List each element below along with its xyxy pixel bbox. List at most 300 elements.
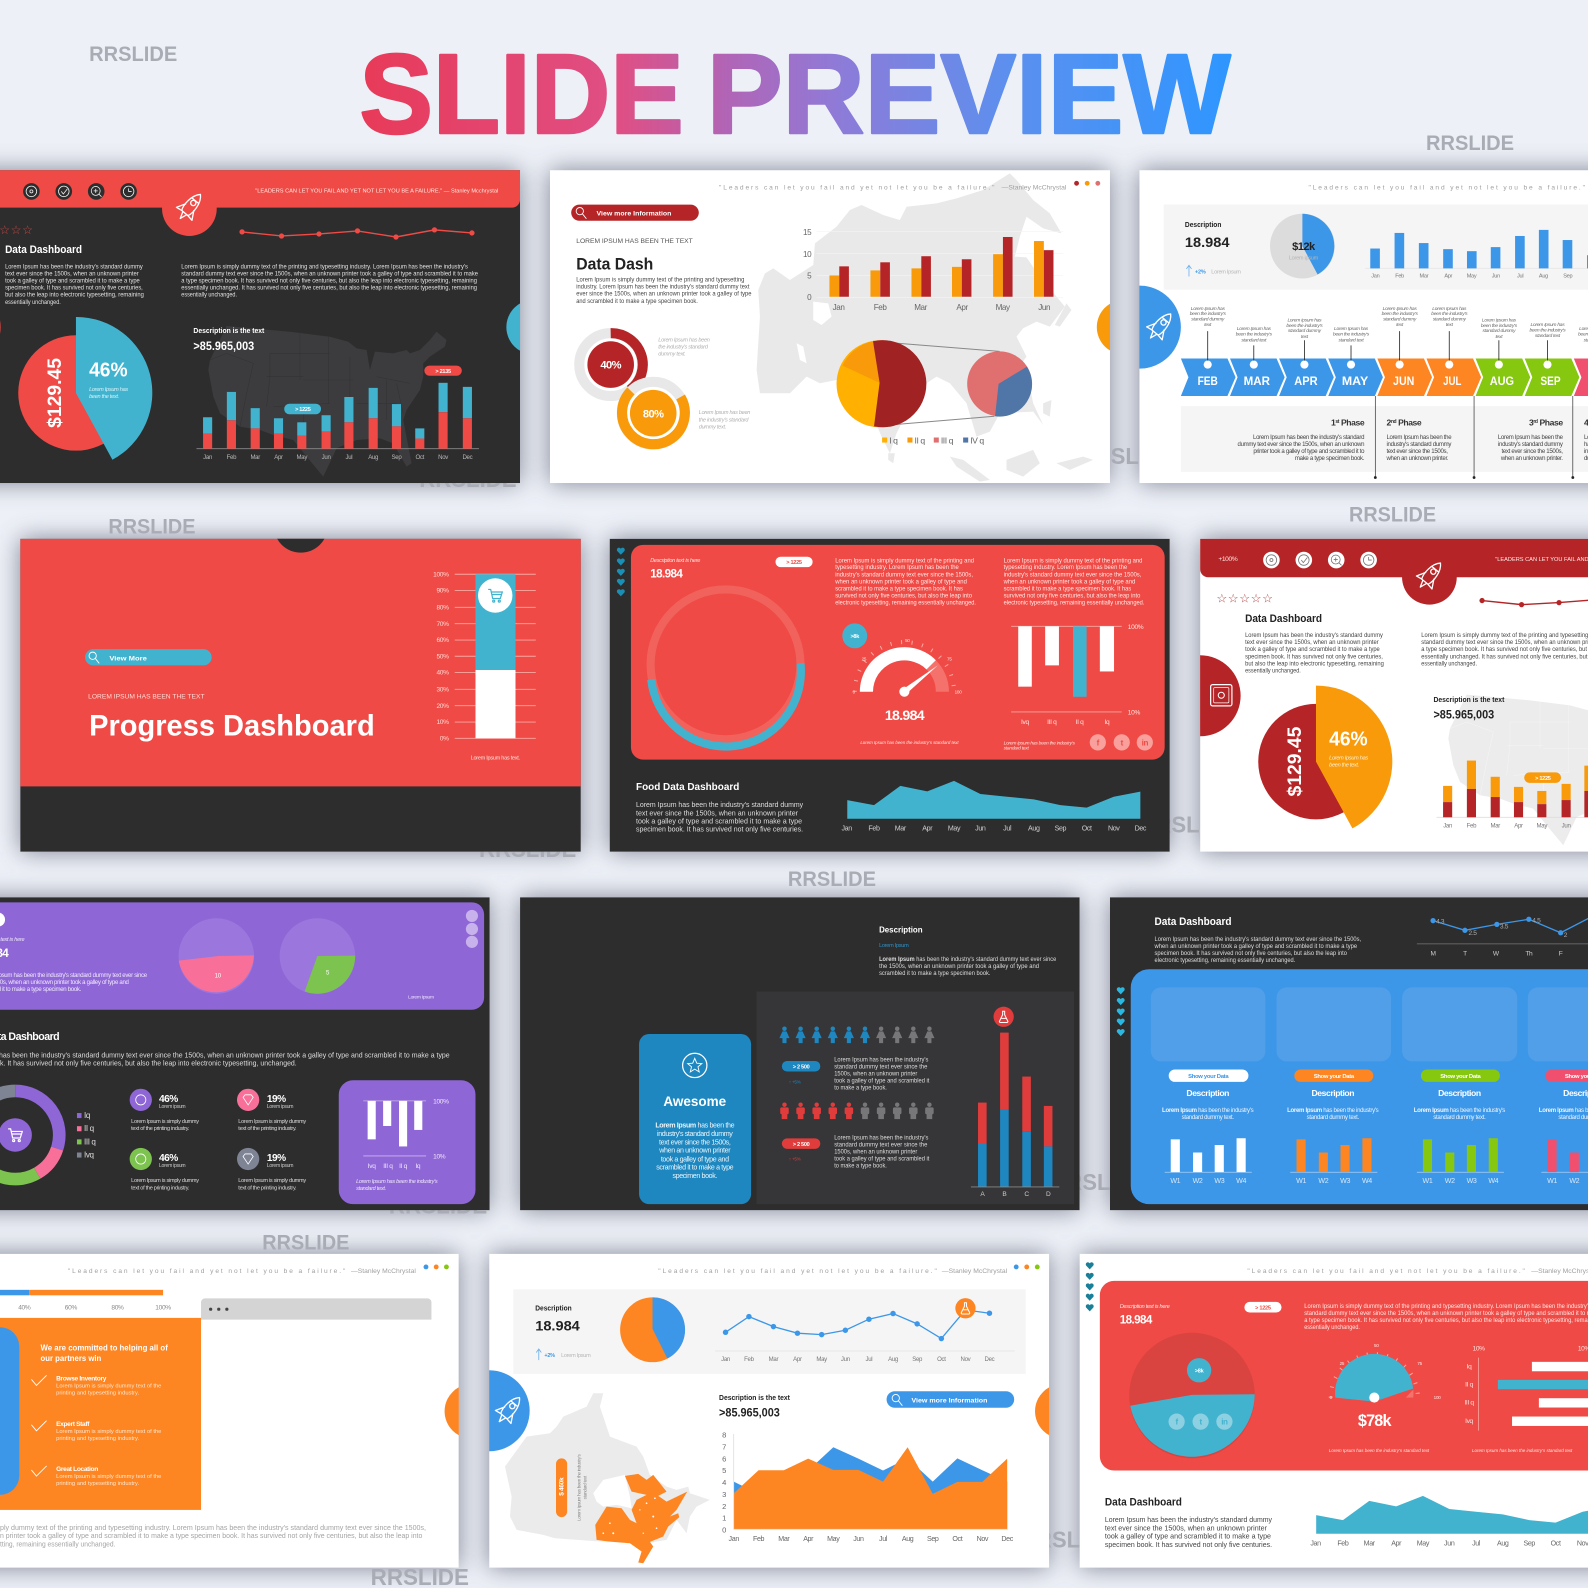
social icons	[466, 910, 478, 948]
text block	[1154, 937, 1361, 964]
stacked bar chart: Mar	[1490, 823, 1500, 829]
edge circle	[445, 1384, 499, 1439]
text block: industry. Lorem Ipsum has been the industry's standard dummy text	[576, 285, 750, 291]
column three: Lorem Ipsum has been the industry's	[1414, 1108, 1505, 1114]
pie chart: $129.45	[1285, 726, 1306, 797]
text block two: electronic typesetting, remaining essentially unchanged.	[1004, 600, 1145, 606]
people row two	[780, 1102, 934, 1119]
column one: W3	[1214, 1177, 1225, 1185]
column three: Show your Data	[1440, 1074, 1482, 1080]
text row two: Lorem Ipsum has been the industry's	[834, 1136, 928, 1142]
area chart: May	[948, 824, 961, 832]
stacked bar chart	[1436, 761, 1588, 829]
column three: Description	[1438, 1088, 1481, 1098]
text block two: survived not only five centuries, but also the leap into	[1004, 594, 1141, 600]
timeline captions: been the industry's	[1382, 311, 1418, 317]
flask badge	[955, 1298, 976, 1318]
pill row one	[782, 1061, 820, 1085]
text block: Lorem Ipsum is simply dummy text of the printing and typesetting	[576, 278, 744, 284]
line chart: Feb	[744, 1357, 755, 1363]
blue card: took a galley of type and	[661, 1155, 729, 1163]
column one: Description	[1186, 1088, 1229, 1098]
gauge: 25	[862, 656, 867, 661]
watermarks: RRSLIDE	[1079, 443, 1176, 469]
quote: "LEADERS CAN LET YOU FAIL AND YET NOT LET YOU BE A FAILURE." — Stanley Mcchrystal	[255, 188, 498, 194]
pie chart: been the text.	[89, 394, 119, 400]
line chart: Nov	[961, 1357, 972, 1363]
flask badge	[994, 1007, 1014, 1027]
description: Description	[879, 926, 923, 935]
legend: III q	[84, 1137, 96, 1146]
text block two: typesetting industry. Lorem Ipsum has been the	[1004, 565, 1128, 571]
stat 46% purple: Lorem Ipsum is simply dummy	[131, 1119, 199, 1125]
quote: —Stanley McChrystal	[1002, 184, 1067, 191]
thermometer chart: 30%	[436, 687, 449, 694]
social icons: f	[1175, 1418, 1178, 1427]
description stat: Description	[1185, 220, 1222, 229]
text block one: scrambled it to make a type specimen book. It has	[835, 586, 963, 592]
pie chart: 46%	[1329, 728, 1368, 750]
area chart: Dec	[1001, 1535, 1014, 1543]
description: scrambled it to make a type specimen book.	[879, 971, 991, 977]
header bar	[0, 170, 520, 208]
item browse inventory: Lorem Ipsum is simply dummy text of the	[56, 1383, 161, 1389]
text block: n printer took a galley of type and scrambled it to make a type specimen book. It has survived not only five centuries, but also the leap into	[0, 1532, 422, 1540]
donut captions: dummy text.	[658, 351, 686, 357]
text block one	[834, 558, 976, 606]
timeline chevrons: AUG	[1490, 374, 1514, 388]
text block: when an unknown printer took a galley of type and scrambled it to make a type	[1154, 944, 1358, 950]
line chart: Oct	[937, 1357, 946, 1363]
quote: —Stanley McChrystal	[942, 1268, 1008, 1275]
horizontal bar chart: Iq	[1467, 1364, 1472, 1371]
edge circle	[1096, 304, 1110, 350]
text block	[0, 973, 148, 993]
stat 19% pink: Lorem ipsum	[267, 1104, 293, 1110]
stat: Description text is here	[650, 558, 700, 564]
small purple chart card: 100%	[433, 1098, 449, 1105]
text row two: took a galley of type and scrambled it	[834, 1157, 930, 1163]
text block right	[1421, 633, 1588, 667]
item expert staff: printing and typesetting industry.	[56, 1436, 140, 1442]
text block: Lorem Ipsum has been the industry's standard dummy text ever since the 1500s,	[1155, 937, 1361, 943]
text block one: typesetting industry. Lorem Ipsum has been the	[835, 565, 959, 571]
callout pills: > 1225	[295, 407, 311, 413]
sparkline	[1479, 598, 1588, 607]
bar chart	[803, 228, 1053, 312]
column four	[1539, 1069, 1588, 1185]
callout pills: > 2135	[435, 369, 451, 375]
bar chart: Feb	[1395, 273, 1404, 279]
item browse inventory: printing and typesetting industry.	[56, 1391, 140, 1397]
panel: slide 10 orange commitments	[0, 1254, 499, 1568]
area chart: Oct	[952, 1535, 963, 1543]
timeline chevrons: JUN	[1393, 374, 1414, 388]
pie chart: $129.45	[45, 358, 66, 428]
stacked bar chart: Jun	[322, 455, 331, 461]
area chart: Mar	[778, 1535, 790, 1543]
stacked bars: C	[1024, 1191, 1029, 1198]
callout pill: > 1225	[1535, 776, 1551, 782]
timeline captions: text	[1396, 322, 1404, 328]
description stat: 18.984	[535, 1319, 580, 1335]
stacked bar chart: Nov	[438, 455, 449, 461]
vertical caption: Lorem Ipsum has been the industry's	[576, 1454, 581, 1521]
bar chart: Apr	[956, 303, 969, 312]
social icons: in	[1142, 738, 1148, 747]
social icons: t	[1121, 738, 1124, 747]
area chart: Dec	[1135, 824, 1147, 832]
gauge	[853, 638, 962, 746]
gauge: 18.984	[885, 708, 925, 724]
text block: tting, remaining essentially unchanged.	[0, 1540, 115, 1548]
line chart: 2.5	[1468, 930, 1477, 937]
card caption: Lorem Ipsum	[408, 995, 434, 1001]
line chart	[715, 1310, 1015, 1363]
pie chart	[620, 1297, 685, 1362]
text row one: took a galley of type and scrambled it	[834, 1079, 930, 1085]
pie chart green	[280, 918, 355, 994]
horizontal bar chart: Ivq	[1465, 1418, 1474, 1425]
gauge: 100	[955, 690, 962, 695]
stat 19% pink: 19%	[267, 1094, 286, 1105]
callout pills	[284, 366, 462, 414]
gauge: 0	[853, 690, 856, 695]
text block: Lorem Ipsum has been the industry's standard dummy	[636, 801, 804, 809]
rocket badge	[162, 194, 217, 236]
column two: W1	[1296, 1177, 1306, 1185]
timeline captions: Lorem Ipsum has	[1531, 322, 1565, 328]
panel: slide 4 progress dashboard	[20, 499, 581, 852]
commitment heading: our partners win	[41, 1353, 101, 1363]
hearts	[1086, 1262, 1094, 1311]
phase text: text ever since the 1500s,	[1501, 449, 1563, 455]
description stat: Lorem Ipsum	[1211, 269, 1241, 275]
column two: W2	[1318, 1177, 1329, 1185]
timeline captions: been the industry's	[1431, 311, 1468, 317]
callout pill	[1524, 772, 1561, 783]
stat 46% purple: text of the printing industry.	[131, 1126, 190, 1132]
bar chart: Jan	[833, 303, 844, 312]
vertical caption: standard text	[582, 1475, 587, 1499]
thermometer chart: 0%	[440, 735, 449, 742]
progress bar: 40%	[18, 1304, 31, 1311]
text row one: Lorem Ipsum has been the industry's	[834, 1058, 928, 1064]
area chart: Jun	[975, 824, 986, 832]
progress bar: 80%	[111, 1304, 124, 1311]
pie legend: I q	[889, 436, 898, 446]
timeline captions: been the industry's	[1236, 332, 1273, 338]
big pie	[1129, 1333, 1255, 1458]
watermarks: RRSLIDE	[479, 836, 576, 862]
inner panel	[757, 991, 1074, 1204]
bar chart: Jan	[1371, 273, 1380, 279]
small purple chart card: II q	[399, 1163, 408, 1170]
text row one: to make a type book.	[834, 1086, 887, 1092]
thermometer chart: 90%	[436, 587, 449, 594]
red card	[1100, 1281, 1588, 1471]
text block right: Lorem Ipsum is simply dummy text of the printing and typesetting industry. Lorem Ipsum has been the industry's	[181, 264, 468, 270]
text block: Lorem Ipsum has been the industry's standard dummy	[1105, 1516, 1272, 1524]
gauge: $78k	[1358, 1412, 1392, 1430]
donut 40%	[579, 333, 643, 396]
horizontal bar chart: III q	[1464, 1400, 1474, 1407]
pie chart	[1270, 214, 1335, 279]
button	[85, 649, 212, 665]
header icons	[1263, 552, 1377, 568]
small purple chart card: III q	[383, 1163, 393, 1170]
small purple chart card: 10%	[433, 1154, 446, 1161]
phase text: Phase	[1396, 417, 1422, 427]
text block two: Lorem Ipsum is simply dummy text of the printing and	[1004, 558, 1142, 564]
pill: > 1225	[786, 560, 802, 566]
bar chart: May	[1467, 273, 1477, 279]
text block one: electronic typesetting, remaining essentially unchanged.	[835, 600, 976, 606]
gauge: Lorem Ipsum has been the industry's standard text	[1329, 1448, 1430, 1454]
subheading: LOREM IPSUM HAS BEEN THE TEXT	[576, 238, 693, 245]
stat 46% green: 46%	[159, 1153, 178, 1164]
column two: standard dummy text.	[1307, 1115, 1360, 1121]
button	[887, 1391, 1014, 1408]
area chart: Jul	[1003, 824, 1012, 832]
legend dots	[1074, 181, 1100, 186]
text block right: essentially unchanged.	[1421, 661, 1477, 667]
stat 19% pink: text of the printing industry.	[238, 1126, 297, 1132]
timeline chevrons: MAR	[1244, 374, 1270, 388]
description stat: Description	[535, 1304, 572, 1313]
blue card: Lorem Ipsum has been the	[655, 1122, 735, 1130]
description stat: Lorem Ipsum	[561, 1353, 591, 1359]
watermarks: RRSLIDE	[1349, 503, 1436, 527]
timeline chevrons	[1181, 359, 1588, 396]
bar chart	[1365, 230, 1588, 279]
area chart: Mar	[895, 824, 907, 832]
hanging bar chart: Iq	[1105, 719, 1110, 726]
stat	[0, 937, 24, 960]
pie chart pink: 10	[215, 973, 222, 979]
watermarks: RRSLIDE	[389, 1192, 487, 1218]
description: >85.965,003	[193, 340, 255, 353]
bar chart: Aug	[1539, 273, 1548, 279]
blue card: when an unknown printer	[658, 1147, 731, 1155]
rocket badge	[1402, 550, 1457, 605]
column three: W2	[1445, 1177, 1455, 1185]
quote: "Leaders can let you fail and yet not let you be a failure."	[719, 184, 995, 191]
area chart: Apr	[1391, 1539, 1402, 1547]
description: >85.965,003	[719, 1407, 780, 1420]
heading: Data Dash	[576, 255, 653, 273]
panel: slide 2 white data dash	[550, 170, 1152, 483]
people row one	[779, 1027, 934, 1043]
text block left: text ever since the 1500s, when an unknown printer	[5, 271, 139, 277]
panel: slide 12 white data dashboard	[1080, 1254, 1588, 1568]
line chart: 3.5	[1500, 924, 1509, 931]
stacked bar chart: Jun	[1562, 823, 1571, 829]
stat 46% purple: 46%	[159, 1094, 178, 1105]
line chart: Th	[1525, 951, 1533, 958]
column two: Show your Data	[1314, 1074, 1355, 1080]
stacked bars	[971, 1033, 1059, 1198]
pill row two	[782, 1138, 820, 1162]
area chart	[722, 1431, 1014, 1543]
bar chart: Jun	[1492, 273, 1500, 279]
heading: Food Data Dashboard	[636, 782, 739, 793]
text block	[1105, 1516, 1272, 1549]
line chart: Jul	[866, 1357, 872, 1363]
timeline chevrons: JUL	[1443, 374, 1462, 388]
pie legend: III q	[941, 436, 954, 446]
stat 46% green: text of the printing industry.	[131, 1185, 190, 1191]
thermometer chart: 70%	[436, 621, 449, 628]
blue card: scrambled it to make a type	[656, 1164, 734, 1172]
phase text: st	[1335, 419, 1340, 425]
text row two: to make a type book.	[834, 1164, 887, 1170]
thermometer chart: 80%	[436, 605, 449, 612]
timeline captions: been the industry's	[1481, 323, 1518, 329]
line chart: F	[1559, 951, 1563, 958]
social icons	[1090, 734, 1153, 750]
edge circle	[1035, 1384, 1090, 1439]
legend dots	[424, 1265, 449, 1269]
column one: Lorem Ipsum has been the industry's	[1162, 1108, 1254, 1114]
small purple chart card: standard text.	[356, 1186, 386, 1192]
area chart: Feb	[868, 824, 880, 832]
stat	[1120, 1304, 1170, 1327]
small purple chart card: Iq	[415, 1163, 421, 1170]
text row two: standard dummy text ever since the	[834, 1142, 928, 1148]
line chart: T	[1463, 951, 1467, 958]
gray tab	[201, 1298, 431, 1320]
watermarks: RRSLIDE	[1050, 1169, 1147, 1195]
text block	[0, 1051, 450, 1067]
rocket badge	[449, 1370, 530, 1451]
stat: 18.984	[1120, 1314, 1153, 1327]
text block: specimen book. It has survived not only five centuries.	[1105, 1541, 1272, 1549]
line chart: Apr	[793, 1357, 802, 1363]
text block: took a galley of type and scrambled it to make a type	[636, 817, 802, 825]
area chart: May	[1417, 1539, 1430, 1547]
phase text: 2	[1386, 417, 1391, 427]
gauge: 50	[905, 638, 910, 643]
text block: specimen book. It has survived not only five centuries, but also the leap into	[1155, 951, 1348, 957]
description	[193, 326, 265, 353]
button: View more Information	[597, 211, 671, 218]
text row one	[834, 1058, 930, 1092]
text block right: a type specimen book. It has survived not only five centuries, but also the leap into electronic typesetting, remaining	[181, 279, 477, 285]
progress bar: 100%	[155, 1304, 171, 1311]
gauge: 75	[947, 656, 952, 661]
column one: W4	[1236, 1177, 1246, 1185]
hanging bar chart	[1004, 624, 1144, 751]
column three: W3	[1467, 1177, 1477, 1185]
heading: Data Dashboard	[1155, 916, 1232, 928]
button: View more Information	[911, 1398, 987, 1405]
area chart: 4	[722, 1478, 726, 1487]
phase text: Lorem Ipsum has been the	[1386, 435, 1452, 441]
gauge: 0	[1330, 1395, 1333, 1400]
description stat: +2%	[544, 1353, 555, 1359]
area chart: Oct	[1082, 824, 1092, 832]
red card	[631, 545, 1165, 760]
description	[1433, 695, 1505, 722]
stacked bar chart: Sep	[392, 455, 402, 461]
progress bar	[0, 1290, 171, 1311]
description: Lorem Ipsum has been the industry's standard dummy text ever since	[879, 957, 1057, 963]
area chart: Sep	[927, 1535, 939, 1543]
pill	[775, 557, 813, 567]
timeline chevrons: APR	[1294, 374, 1318, 388]
stacked bars: D	[1046, 1191, 1051, 1198]
gauge: 50	[1374, 1343, 1379, 1348]
stacked bar chart: Jan	[203, 455, 212, 461]
quote: "Leaders can let you fail and yet not let you be a failure."	[658, 1268, 937, 1275]
title: PREVIEW	[707, 31, 1230, 158]
column one: Show your Data	[1188, 1074, 1229, 1080]
timeline captions: standard dummy	[1482, 328, 1516, 334]
text block left: specimen book. It has survived not only five centuries,	[5, 286, 143, 292]
text block left: essentially unchanged.	[1245, 668, 1301, 674]
text block: took a galley of type and scrambled it to make a type	[1105, 1533, 1271, 1541]
gauge: 25	[1340, 1361, 1345, 1366]
text block left: Lorem Ipsum has been the industry's standard dummy	[5, 264, 144, 270]
rocket badge	[1139, 286, 1181, 369]
timeline captions: standard dummy	[1288, 328, 1322, 334]
small purple chart card	[339, 1080, 475, 1204]
watermarks: RRSLIDE	[108, 515, 195, 539]
column two	[1287, 1069, 1379, 1185]
item expert staff: Expert Staff	[56, 1421, 90, 1428]
gauge: 75	[1417, 1361, 1423, 1366]
thermometer chart: 10%	[436, 719, 449, 726]
watermarks: RRSLIDE	[788, 867, 876, 891]
timeline captions: Lorem Ipsum has	[1432, 306, 1467, 312]
item great location: printing and typesetting industry.	[56, 1481, 140, 1487]
description: Description is the text	[719, 1393, 790, 1402]
panel: slide 9 blue dashboard	[1110, 897, 1588, 1210]
heading: Data Dashboard	[1105, 1496, 1182, 1508]
timeline chevrons: MAY	[1342, 374, 1368, 388]
donut captions: the industry's standard	[699, 417, 749, 423]
area chart: Feb	[1337, 1539, 1349, 1547]
bar chart: Jun	[1038, 303, 1050, 312]
area chart: Nov	[1108, 824, 1120, 832]
thermometer chart: Lorem Ipsum has text.	[471, 756, 521, 762]
phase text: nd	[1391, 419, 1396, 425]
pie chart: been the text.	[1329, 763, 1359, 769]
pie chart: Lorem ipsum	[1289, 255, 1319, 261]
panel: slide 6 white data dashboard	[1160, 539, 1588, 852]
pill: > 1225	[1255, 1305, 1271, 1311]
map of USA	[208, 326, 447, 477]
watermarks: RRSLIDE	[1139, 811, 1237, 837]
map of USA	[1448, 695, 1588, 845]
header label: +100%	[1218, 556, 1238, 563]
pie chart: 46%	[89, 360, 128, 382]
panel: slide 7 purple dashboard	[0, 897, 490, 1210]
legend: Iq	[84, 1111, 90, 1120]
text block: and scrambled it to make a type specimen book.	[576, 299, 698, 305]
area chart: Feb	[753, 1535, 765, 1543]
area chart: Jan	[729, 1535, 739, 1543]
area chart	[1310, 1496, 1588, 1547]
stacked bar chart: Aug	[368, 455, 378, 461]
area chart: Apr	[803, 1535, 814, 1543]
pie chart	[1258, 686, 1392, 828]
area chart: 6	[722, 1454, 726, 1463]
line chart: Mar	[769, 1357, 778, 1363]
timeline captions: Lorem Ipsum has	[1191, 306, 1225, 312]
pill row two: > 2 500	[793, 1142, 810, 1148]
